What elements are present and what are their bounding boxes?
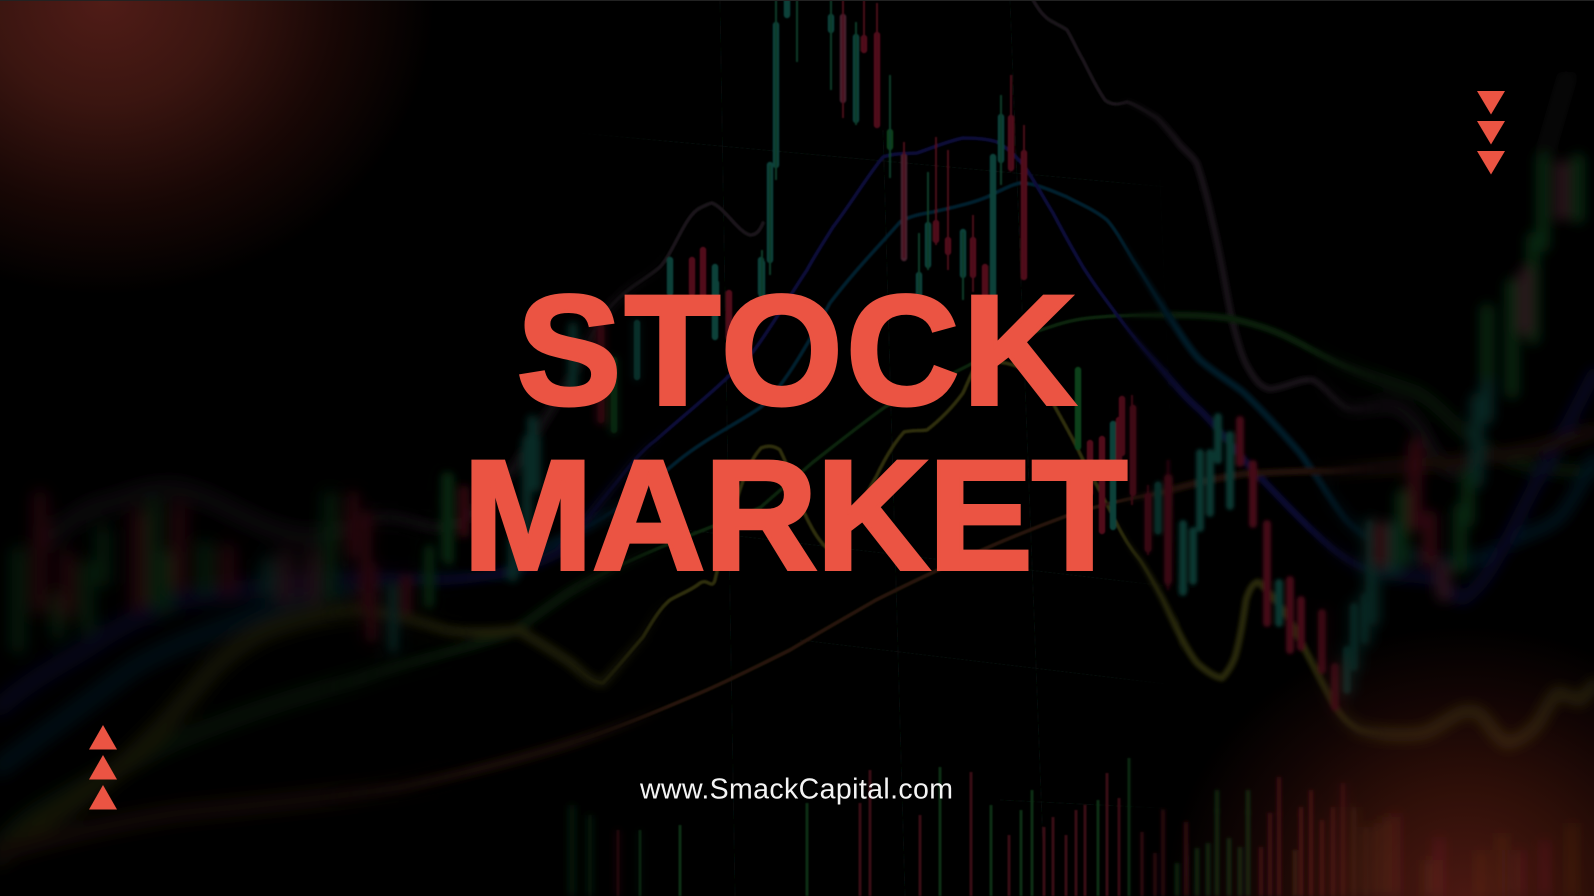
title [463,264,1127,603]
red glow: bottom right [1150,620,1594,896]
title line: MARKET: MARKET [463,429,1127,603]
website url: www.SmackCapital.com [639,774,953,806]
top edge line [0,0,1594,1]
red glow: top left [0,0,440,300]
title line: STOCK: STOCK [517,264,1079,438]
icon: up triangles [89,725,117,810]
icon: down triangles [1477,91,1505,174]
